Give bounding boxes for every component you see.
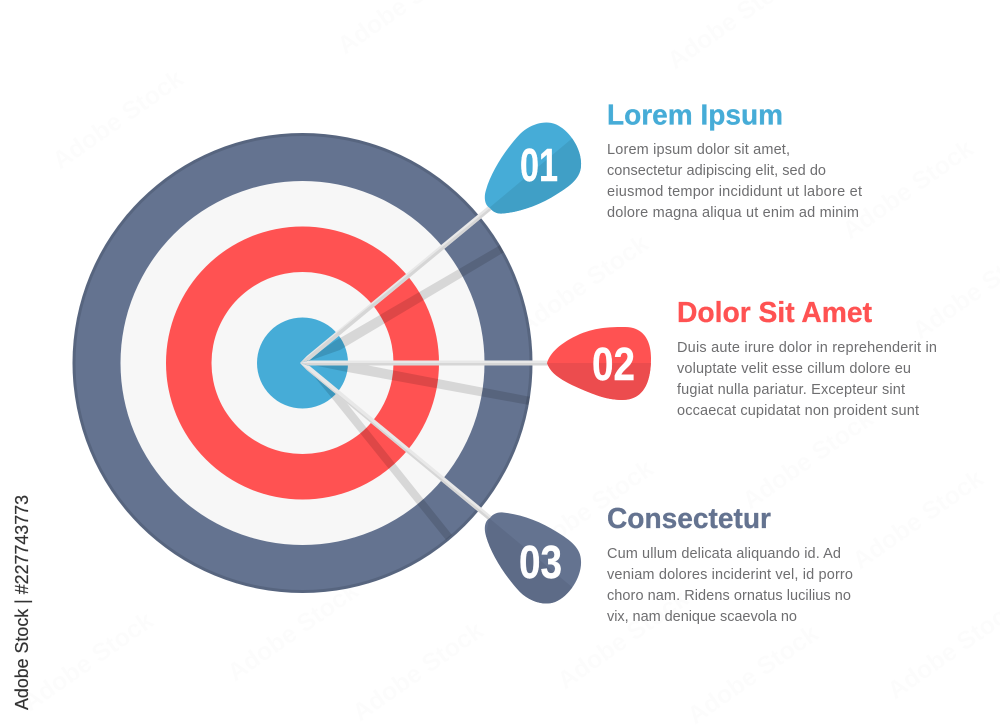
body text 3 xyxy=(607,546,853,625)
stock watermark pattern: Adobe Stock xyxy=(222,576,364,687)
stock watermark pattern: Adobe Stock xyxy=(682,619,824,727)
body text 1: consectetur adipiscing elit, sed do xyxy=(607,163,826,179)
body text 3: choro nam. Ridens ornatus lucilius no xyxy=(607,588,851,604)
body text 1: eiusmod tempor incididunt ut labore et xyxy=(607,184,862,200)
dart number 01: 01 xyxy=(520,139,558,191)
heading: Lorem Ipsum: Lorem Ipsum xyxy=(607,100,783,132)
stock id side label: Adobe Stock | #227743773 xyxy=(12,495,32,710)
stock watermark pattern: Adobe Stock xyxy=(847,464,989,575)
body text 3: vix, nam denique scaevola no xyxy=(607,609,797,625)
text block: Dolor Sit Amet xyxy=(677,297,937,419)
stock watermark pattern: Adobe Stock xyxy=(17,606,159,717)
body text 2: voluptate velit esse cillum dolore eu xyxy=(677,361,911,377)
body text 2: occaecat cupidatat non proident sunt xyxy=(677,403,919,419)
stock watermark pattern: Adobe Stock xyxy=(47,64,189,175)
stock watermark pattern: Adobe Stock xyxy=(517,454,659,565)
body text 3: veniam dolores inciderint vel, id porro xyxy=(607,567,853,583)
heading: Consectetur: Consectetur xyxy=(607,503,771,535)
stock watermark pattern: Adobe Stock xyxy=(737,404,879,515)
dart number 02: 02 xyxy=(592,338,635,390)
body text 2: Duis aute irure dolor in reprehenderit in xyxy=(677,340,937,356)
dart shadows on target xyxy=(303,244,531,540)
stock watermark pattern: Adobe Stock xyxy=(512,229,654,340)
target board xyxy=(72,133,532,593)
stock watermark pattern: Adobe Stock xyxy=(837,134,979,245)
dart 03 xyxy=(300,363,581,604)
text block: Consectetur xyxy=(607,503,853,625)
body text 3: Cum ullum delicata aliquando id. Ad xyxy=(607,546,841,562)
body text 1 xyxy=(607,142,862,221)
stock watermark pattern: Adobe Stock xyxy=(347,616,489,727)
dart 01 xyxy=(300,122,581,363)
heading: Dolor Sit Amet: Dolor Sit Amet xyxy=(677,297,872,329)
infographic canvas xyxy=(14,104,936,710)
dart 02 xyxy=(300,327,651,400)
body text 2 xyxy=(677,340,937,419)
dart number 03: 03 xyxy=(519,536,562,588)
body text 1: dolore magna aliqua ut enim ad minim xyxy=(607,205,859,221)
stock watermark pattern: Adobe Stock xyxy=(552,584,694,695)
body text 2: fugiat nulla pariatur. Excepteur sint xyxy=(677,382,905,398)
body text 1: Lorem ipsum dolor sit amet, xyxy=(607,142,790,158)
text block: Lorem Ipsum xyxy=(607,100,862,221)
